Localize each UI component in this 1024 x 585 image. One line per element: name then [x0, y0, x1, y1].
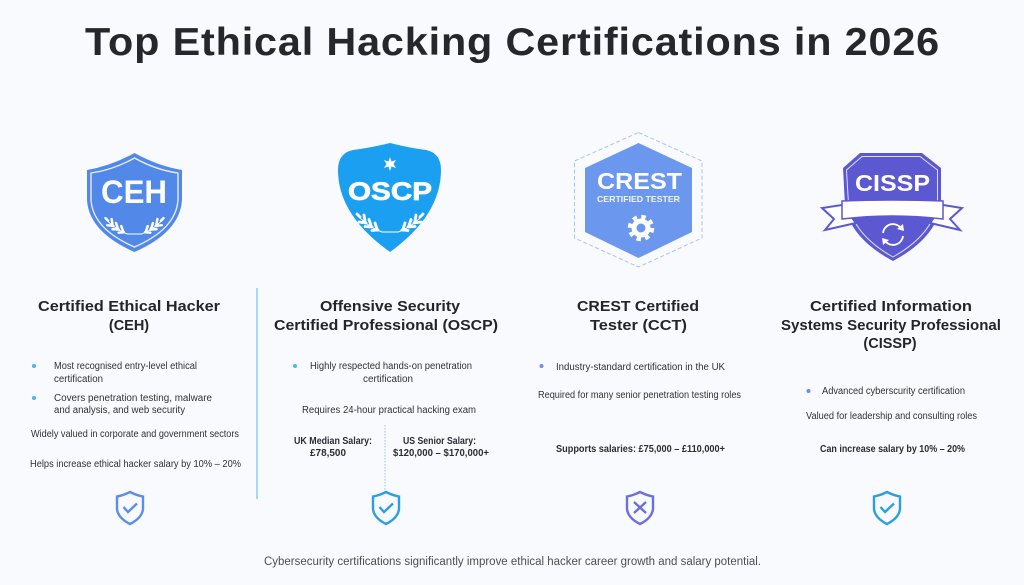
bullet list: CEH: Widely valued in corporate and government sectors: [31, 429, 239, 440]
bullet list: CCT: Required for many senior penetration testing roles: [538, 390, 741, 401]
salary: UK median: £78,500: [310, 448, 347, 459]
bullet list: CCT: Industry-standard certification in the UK: [556, 362, 725, 373]
bullet list: CEH: Helps increase ethical hacker salary by 10% – 20%: [30, 459, 241, 470]
badge: OSCP shield: OSCP: [348, 178, 432, 206]
bullet list: CEH: Covers penetration testing, malware: [54, 393, 213, 404]
bullet list: CISSP: Valued for leadership and consulting roles: [806, 411, 977, 422]
heading: CCT: CREST Certified: [577, 299, 699, 315]
bullet list: CEH: certification: [54, 374, 103, 385]
bullet list: OSCP: [293, 361, 476, 416]
title: Top Ethical Hacking Certifications in 2026: [85, 21, 940, 64]
badge: OSCP shield: [338, 143, 441, 252]
badge: CISSP shield and ribbon: [822, 153, 962, 261]
heading: CEH: [38, 299, 220, 334]
icon: shield check: [117, 492, 143, 524]
bullet list: CEH: [30, 361, 241, 470]
badge: CREST hexagon: [574, 132, 702, 267]
bullet list: CCT: [538, 362, 741, 455]
heading: CISSP: (CISSP): [863, 336, 917, 352]
divider: between CEH and OSCP: [256, 288, 258, 499]
heading: CISSP: Systems Security Professional: [781, 318, 1001, 334]
heading: CISSP: [781, 299, 1001, 352]
bullet list: CISSP: Advanced cyberscurity certification: [822, 386, 965, 397]
panel: CISSP: [781, 153, 1001, 524]
badge: CREST hexagon: CREST: [597, 168, 682, 194]
panel: OSCP: [274, 143, 498, 524]
bullet list: CISSP: Can increase salary by 10% – 20%: [820, 444, 965, 455]
heading: CEH: Certified Ethical Hacker: [38, 299, 220, 315]
heading: OSCP: Certified Professional (OSCP): [274, 318, 498, 334]
salary: US senior: $120,000 – $170,000+: [393, 448, 489, 459]
icon: shield cross: [627, 492, 653, 524]
heading: OSCP: Offensive Security: [320, 299, 460, 315]
salary: US senior: [393, 436, 489, 459]
footer note: Cybersecurity certifications significantly improve ethical hacker career growth and salary potential.: [264, 556, 761, 568]
bullet list: CEH: Most recognised entry-level ethical: [54, 361, 197, 372]
bullet list: OSCP: Requires 24-hour practical hacking exam: [302, 405, 476, 416]
icon: shield check: [874, 492, 900, 524]
heading: CEH: (CEH): [109, 318, 149, 334]
bullet list: CCT: Supports salaries: £75,000 – £110,000+: [556, 444, 725, 455]
bullet list: CEH: and analysis, and web security: [54, 405, 185, 416]
panel: CEH: [30, 153, 241, 524]
bullet list: OSCP: Highly respected hands-on penetration: [310, 361, 472, 372]
badge: CREST hexagon: CERTIFIED TESTER: [597, 194, 680, 204]
salary: UK median: [294, 436, 372, 459]
heading: OSCP: [274, 299, 498, 334]
panel: CCT: [538, 132, 741, 524]
heading: CISSP: Certified Information: [810, 299, 972, 315]
salary: US senior: US Senior Salary:: [403, 436, 476, 447]
badge: CEH shield: CEH: [101, 174, 167, 210]
heading: CCT: [577, 299, 699, 334]
salary: UK median: UK Median Salary:: [294, 436, 372, 447]
bullet list: OSCP: certification: [363, 374, 413, 385]
heading: CCT: Tester (CCT): [590, 318, 687, 334]
icon: shield check: [373, 492, 399, 524]
divider: salary dotted line: [384, 425, 386, 490]
badge: CISSP shield and ribbon: CISSP: [855, 170, 930, 196]
bullet list: CISSP: [806, 386, 977, 455]
badge: CEH shield: [87, 153, 182, 252]
